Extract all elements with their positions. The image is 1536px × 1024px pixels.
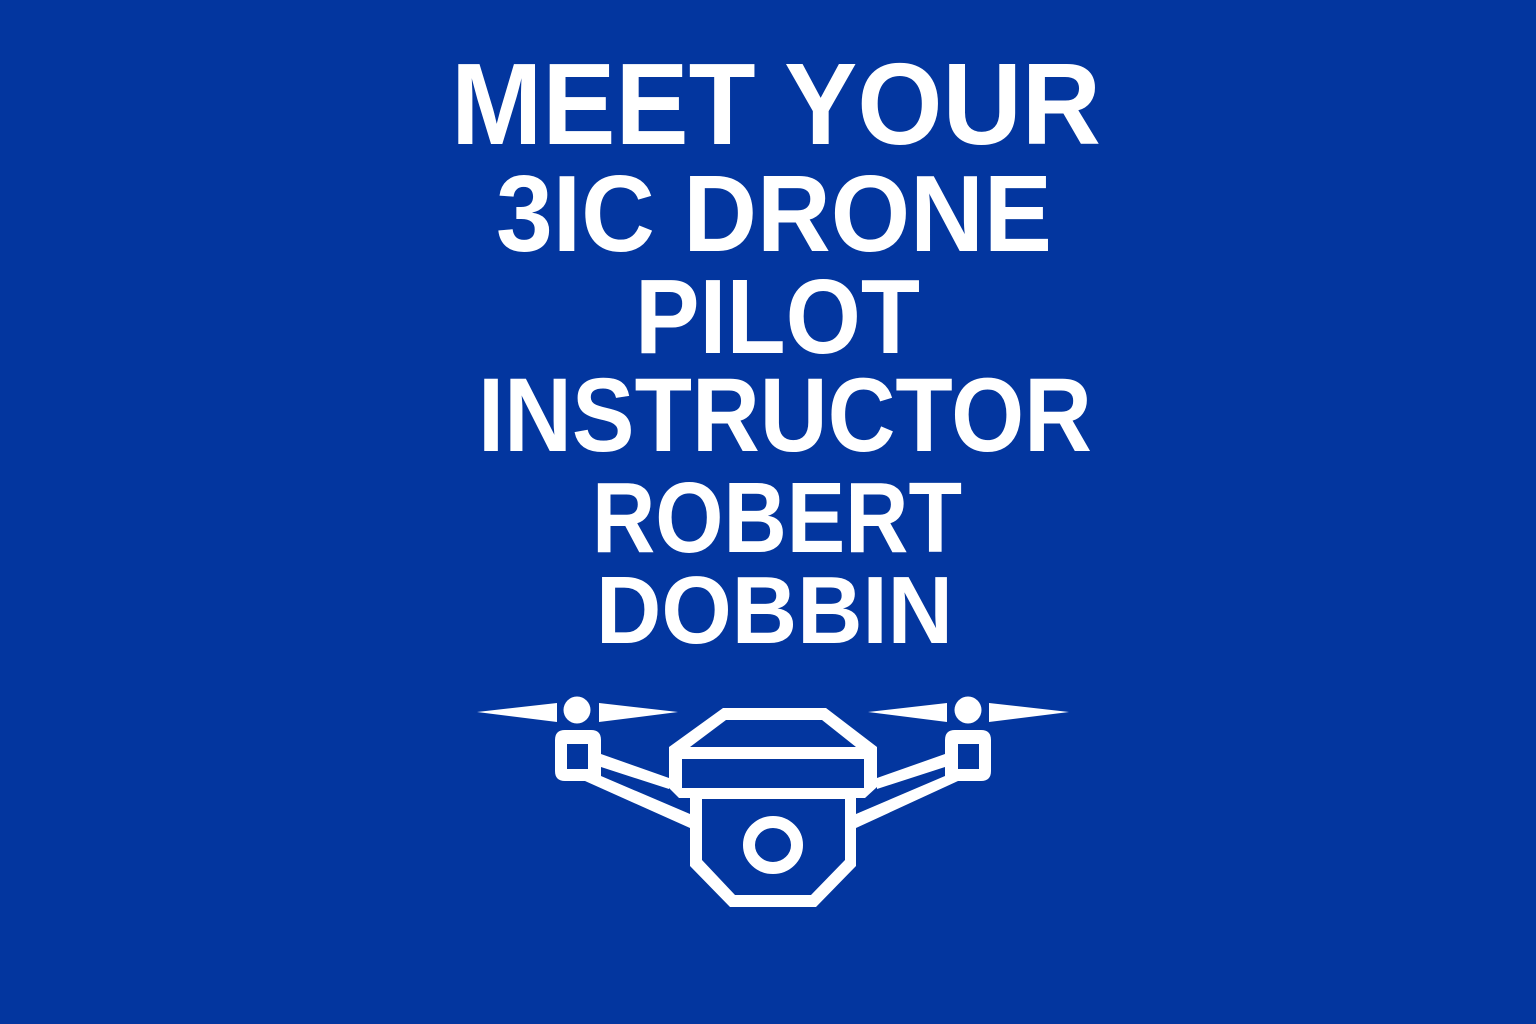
camera housing bbox=[690, 796, 856, 907]
right arm bbox=[856, 754, 958, 828]
name line: Dobbin: DOBBIN bbox=[596, 557, 953, 664]
left arm bbox=[585, 754, 690, 828]
icon: drone bbox=[477, 696, 1069, 907]
title line: pilot: PILOT bbox=[635, 258, 920, 376]
title line: meet your: MEET YOUR bbox=[451, 39, 1101, 169]
left rotor bbox=[477, 696, 678, 724]
right rotor bbox=[868, 696, 1069, 724]
title line: 3IC drone: 3IC DRONE bbox=[496, 153, 1052, 275]
name line: Robert: ROBERT bbox=[592, 462, 962, 574]
right motor bbox=[945, 730, 991, 781]
title line: instructor: INSTRUCTOR bbox=[478, 357, 1092, 474]
title bbox=[451, 39, 1101, 664]
camera lens bbox=[749, 822, 797, 868]
drone body bbox=[669, 708, 877, 798]
left motor bbox=[555, 730, 601, 781]
